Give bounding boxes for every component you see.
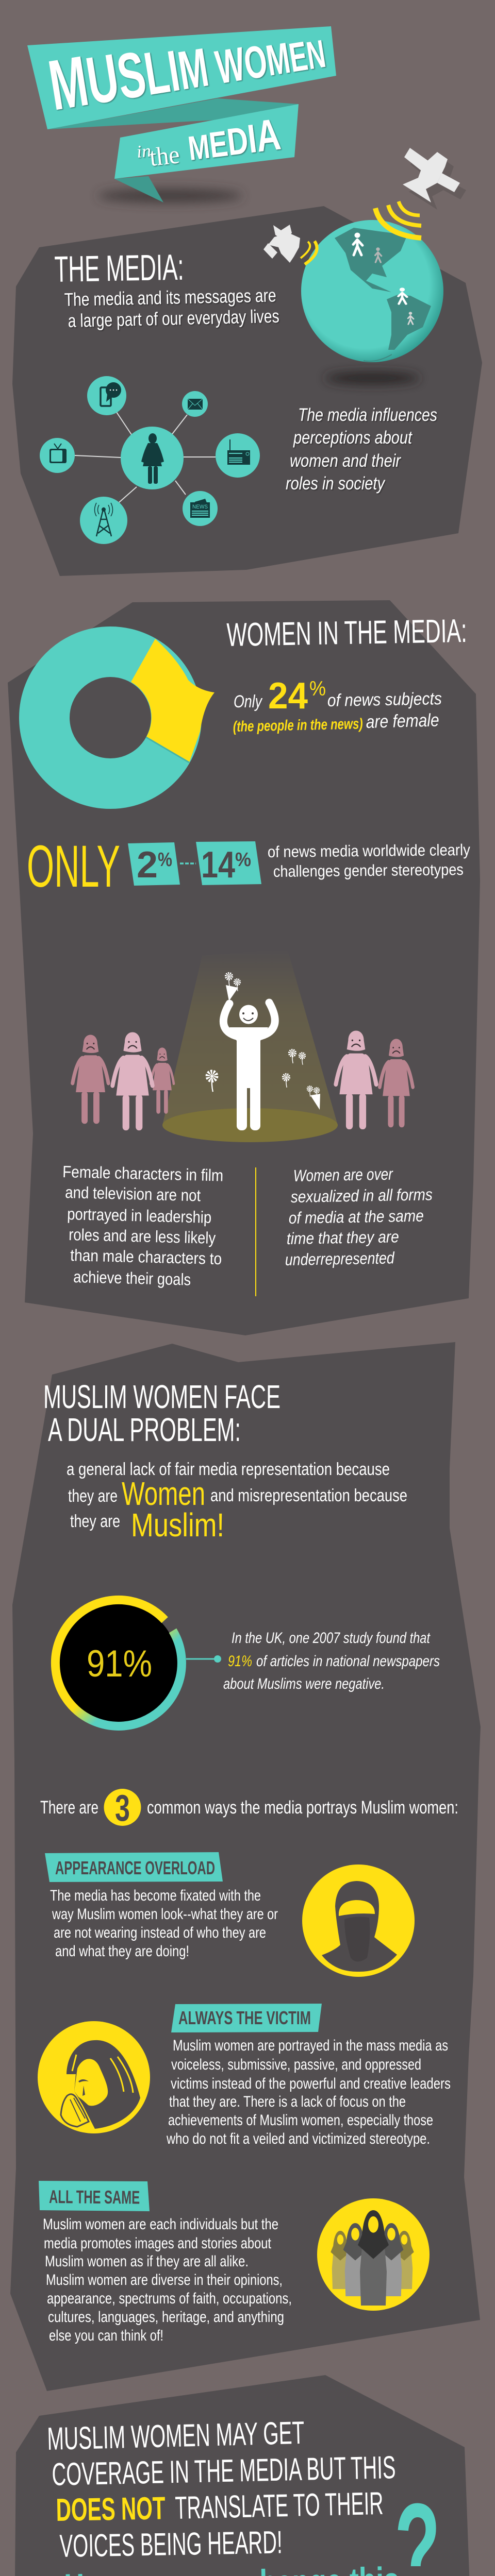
text: women over sexualized: Women are over xyxy=(293,1165,393,1185)
title line: in the Media: in xyxy=(136,141,152,162)
stat: only 2 to 14 percent: % xyxy=(235,849,251,871)
icon: television xyxy=(40,438,75,473)
stat: only 2 to 14 percent: challenges gender stereotypes xyxy=(273,860,464,880)
text: female characters: achieve their goals xyxy=(73,1267,191,1289)
panel: the media xyxy=(12,148,482,576)
icon: radio xyxy=(216,433,260,478)
title line: Muslim Women: MUSLIM WOMEN xyxy=(43,4,329,126)
section: appearance overload: and what they are doing! xyxy=(55,1943,189,1960)
callout: how can you change this xyxy=(64,2477,440,2576)
text: media influences: perceptions about xyxy=(293,428,412,448)
text: female characters: and television are not xyxy=(65,1183,201,1205)
connector xyxy=(186,1655,221,1663)
divider line xyxy=(255,1167,256,1296)
heading: may get coverage: DOES NOT xyxy=(56,2490,166,2528)
stat: only 2 to 14 percent xyxy=(27,834,470,900)
text: dual problem explanation: they are xyxy=(68,1486,118,1506)
text: dual problem explanation: a general lack of fair media representation because xyxy=(67,1460,390,1479)
stat: 24 percent: (the people in the news) xyxy=(233,716,363,735)
heading: the media: THE MEDIA: xyxy=(54,247,184,290)
section: all the same: media promotes images and stories about xyxy=(44,2235,272,2252)
stat: only 2 to 14 percent: % xyxy=(158,849,172,871)
title line: in the Media: MEDIA xyxy=(185,110,283,170)
stat: 24 percent: 24 xyxy=(268,675,308,717)
heading: dual problem: A DUAL PROBLEM: xyxy=(48,1411,241,1448)
title ribbon xyxy=(27,4,336,203)
chart: 91 percent ring xyxy=(55,1600,182,1726)
text: dual problem explanation: they are xyxy=(70,1512,120,1531)
icon: woman xyxy=(121,427,184,489)
text: women over sexualized: time that they are xyxy=(286,1227,399,1248)
text: women over sexualized: of media at the same xyxy=(288,1206,424,1227)
section: always the victim: voiceless, submissive, passive, and oppressed xyxy=(171,2056,421,2073)
illustration: woman in spotlight xyxy=(73,948,413,1142)
text: dual problem explanation xyxy=(67,1460,407,1544)
section: appearance overload: way Muslim women look--what they are or xyxy=(52,1906,278,1923)
icon: broadcast tower xyxy=(80,497,127,544)
text: dual problem explanation: Women xyxy=(122,1475,205,1512)
icon: newspaper: NEWS xyxy=(192,504,208,510)
icon: crying woman xyxy=(38,2021,150,2133)
text: media messages xyxy=(64,284,279,331)
text: three common ways xyxy=(40,1788,458,1829)
text: media messages: The media and its messages are xyxy=(64,284,276,310)
text: female characters xyxy=(62,1162,224,1289)
section: appearance overload xyxy=(45,1852,415,1977)
chart: 91 percent ring: 91% xyxy=(87,1643,152,1685)
stat: only 2 to 14 percent: 14 xyxy=(201,844,235,886)
heading: dual problem: MUSLIM WOMEN FACE xyxy=(43,1378,280,1415)
icon: globe xyxy=(301,220,443,384)
section: all the same xyxy=(39,2181,430,2344)
section: always the victim: ALWAYS THE VICTIM xyxy=(178,2007,311,2028)
text: female characters: portrayed in leadership xyxy=(67,1205,212,1227)
text: media influences: roles in society xyxy=(286,473,386,494)
section: always the victim xyxy=(38,2004,451,2147)
stat: only 2 to 14 percent: ONLY xyxy=(27,834,120,900)
heading: may get coverage xyxy=(47,2415,396,2564)
panel: speak up listen up xyxy=(12,2375,482,2576)
stat: 24 percent: Only xyxy=(234,692,263,711)
flowers xyxy=(208,974,320,1110)
text: women over sexualized: sexualized in all forms xyxy=(290,1185,433,1206)
stat: 24 percent: are female xyxy=(366,710,439,732)
text: UK study: 91% xyxy=(228,1653,252,1670)
stat: 24 percent: of news subjects xyxy=(327,689,442,710)
text: UK study: In the UK, one 2007 study found that xyxy=(232,1630,431,1647)
pink women right xyxy=(336,1030,413,1129)
stat: 24 percent xyxy=(233,675,442,735)
section: all the same: Muslim women are each individuals but the xyxy=(43,2216,278,2233)
spotlight beam xyxy=(162,948,338,1125)
title line: in the Media xyxy=(136,110,283,172)
section: appearance overload: The media has become fixated with the xyxy=(50,1887,261,1904)
text: female characters: Female characters in film xyxy=(62,1162,224,1185)
text: UK study: of articles in national newspapers xyxy=(256,1653,440,1670)
panel: muslim women dual problem xyxy=(10,1342,481,2391)
section: all the same: appearance, spectrums of faith, occupations, xyxy=(47,2290,292,2307)
text: women over sexualized xyxy=(285,1165,433,1269)
icon: large satellite xyxy=(403,148,466,210)
heading: may get coverage: MUSLIM WOMEN MAY GET xyxy=(47,2415,305,2457)
text: dual problem explanation: Muslim! xyxy=(131,1506,224,1544)
stat: only 2 to 14 percent: 2 xyxy=(137,844,158,886)
icon: newspaper xyxy=(183,491,218,526)
section: all the same: Muslim women are diverse in their opinions, xyxy=(46,2272,283,2289)
section: all the same: cultures, languages, heritage, and anything xyxy=(48,2309,284,2326)
text: female characters: roles and are less likely xyxy=(69,1225,216,1247)
text: female characters: than male characters to xyxy=(70,1246,222,1268)
section: all the same: Muslim women as if they are all alike. xyxy=(45,2253,249,2270)
section: appearance overload: APPEARANCE OVERLOAD xyxy=(55,1857,215,1878)
text: three common ways: 3 xyxy=(115,1788,130,1829)
text: media messages: a large part of our everyday lives xyxy=(68,306,279,331)
stat: only 2 to 14 percent: of news media worldwide clearly xyxy=(268,841,470,861)
heading: may get coverage: VOICES BEING HEARD! xyxy=(59,2524,283,2564)
spotlight floor xyxy=(162,1108,338,1142)
text: media influences: The media influences xyxy=(298,405,437,425)
text: UK study: about Muslims were negative. xyxy=(223,1675,385,1692)
chart: donut 24 percent xyxy=(44,639,214,784)
text: women over sexualized: underrepresented xyxy=(285,1248,395,1269)
smiling figure xyxy=(223,1003,275,1130)
icon: phone and chat xyxy=(87,376,126,415)
heading: dual problem xyxy=(43,1378,280,1448)
section: always the victim: who do not fit a veiled and victimized stereotype. xyxy=(166,2130,430,2147)
section: appearance overload: are not wearing instead of who they are xyxy=(54,1924,266,1941)
stat: 24 percent: % xyxy=(309,677,326,700)
text: media influences: women and their xyxy=(290,451,401,471)
icon: group of veiled women xyxy=(317,2198,430,2311)
text: UK study xyxy=(223,1630,440,1692)
section: always the victim: that they are. There is a lack of focus on the xyxy=(169,2093,406,2110)
panel: women in the media xyxy=(8,600,480,1335)
icon: small satellite xyxy=(263,225,300,263)
text: three common ways: There are xyxy=(40,1798,98,1818)
icon: veiled woman xyxy=(302,1865,415,1977)
text: media influences xyxy=(286,405,437,494)
section: all the same: else you can think of! xyxy=(49,2327,163,2344)
text: dual problem explanation: and misrepresentation because xyxy=(210,1486,407,1505)
icon: mail xyxy=(182,391,208,417)
pink women left xyxy=(73,1032,174,1130)
title line: in the Media: the xyxy=(148,140,181,172)
icon: signal arcs xyxy=(301,201,421,264)
icon: walking people xyxy=(353,232,414,324)
diagram: woman and media network xyxy=(40,376,260,544)
section: all the same: ALL THE SAME xyxy=(49,2186,140,2208)
